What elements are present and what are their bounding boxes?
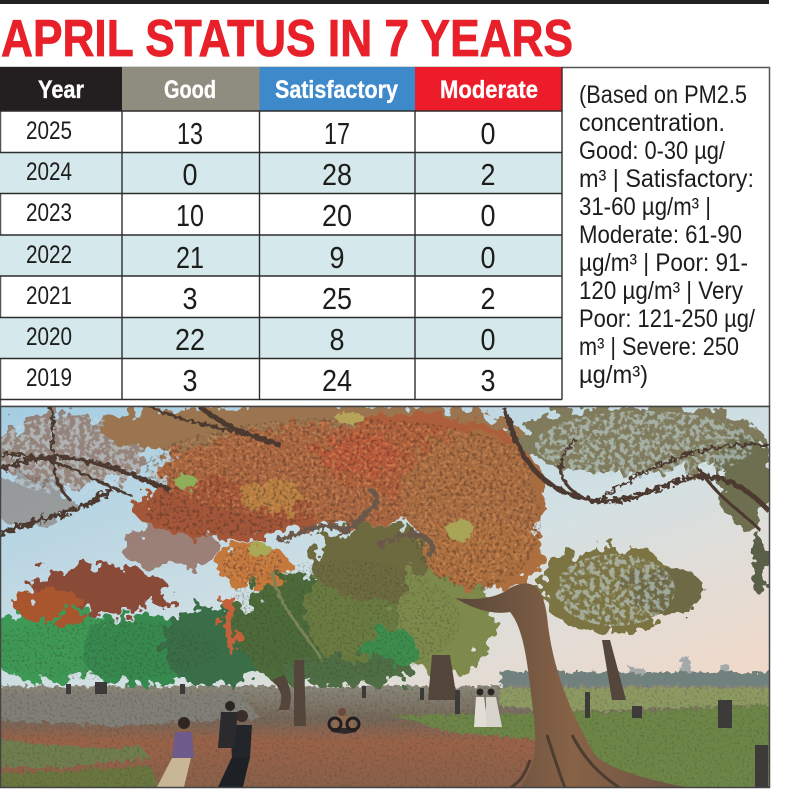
row 2019: 2019 xyxy=(26,364,72,392)
row 2020 xyxy=(26,322,496,357)
title: APRIL STATUS IN 7 YEARS xyxy=(1,10,573,68)
panel: frame xyxy=(0,68,770,406)
row 2024: 0 xyxy=(182,157,198,192)
table row fills xyxy=(0,152,562,358)
table header: Year xyxy=(38,76,84,104)
canopy light texture xyxy=(150,420,537,583)
table header xyxy=(0,67,562,111)
row 2019: 24 xyxy=(322,363,352,398)
left tree foliage xyxy=(0,414,220,621)
ground xyxy=(0,686,780,798)
row 2021 xyxy=(26,281,496,316)
row 2019: 3 xyxy=(182,363,198,398)
row 2023: 0 xyxy=(480,198,496,233)
ground texture xyxy=(0,686,770,788)
table header: Good xyxy=(164,76,216,104)
photo border xyxy=(0,406,770,788)
sky gaps in outer foliage xyxy=(0,411,755,626)
note: PM2.5 category ranges: m³ | Satisfactory: xyxy=(579,165,754,193)
people xyxy=(66,682,768,787)
row 2024: 2 xyxy=(480,157,496,192)
distant skyline xyxy=(498,656,769,689)
row 2020: 22 xyxy=(175,322,205,357)
table: April status by year xyxy=(0,67,562,400)
note: PM2.5 category ranges: 31-60 µg/m³ | xyxy=(579,193,711,221)
note: PM2.5 category ranges: 120 µg/m³ | Very xyxy=(579,277,743,305)
main trunk xyxy=(455,583,690,788)
row 2024: 28 xyxy=(322,157,352,192)
row 2022: 0 xyxy=(480,240,496,275)
row 2025 xyxy=(26,116,496,151)
row 2020: 8 xyxy=(330,322,344,357)
row 2022: 9 xyxy=(330,240,344,275)
note: PM2.5 category ranges xyxy=(579,81,755,389)
table header: Satisfactory xyxy=(275,76,398,104)
branches xyxy=(0,407,768,660)
row 2025: 2025 xyxy=(26,117,72,145)
row 2021: 3 xyxy=(182,281,198,316)
note: PM2.5 category ranges: Good: 0-30 µg/ xyxy=(579,137,725,165)
top right tree foliage xyxy=(515,406,770,634)
row 2024 xyxy=(26,157,496,192)
row 2023: 2023 xyxy=(26,199,72,227)
note: PM2.5 category ranges: Moderate: 61-90 xyxy=(579,221,742,249)
table grid xyxy=(0,67,562,400)
row 2019 xyxy=(26,363,496,398)
note: PM2.5 category ranges: (Based on PM2.5 xyxy=(579,81,747,109)
note: PM2.5 category ranges: Poor: 121-250 µg/ xyxy=(579,305,755,333)
note: PM2.5 category ranges: m³ | Severe: 250 xyxy=(579,333,739,361)
row 2023: 10 xyxy=(176,198,204,233)
row 2024: 2024 xyxy=(26,158,72,186)
main canopy xyxy=(100,400,547,655)
row 2019: 3 xyxy=(480,363,496,398)
row 2025: 13 xyxy=(177,116,203,151)
row 2021: 2021 xyxy=(26,282,72,310)
green tree texture xyxy=(0,560,460,680)
top rule xyxy=(0,0,769,4)
row 2025: 17 xyxy=(324,116,350,151)
row 2023: 20 xyxy=(322,198,352,233)
row 2021: 2 xyxy=(480,281,496,316)
group in white xyxy=(474,688,502,727)
mid tree trunks xyxy=(272,640,626,726)
row 2020: 0 xyxy=(480,322,496,357)
row 2025: 0 xyxy=(480,116,496,151)
row 2022: 21 xyxy=(176,240,204,275)
row 2023 xyxy=(26,198,496,233)
row 2022: 2022 xyxy=(26,241,72,269)
leaf highlights xyxy=(174,412,474,557)
green trees xyxy=(0,524,495,686)
sky xyxy=(0,407,770,692)
distant walkers xyxy=(66,682,768,787)
table header: Moderate xyxy=(440,76,538,104)
row 2022 xyxy=(26,240,496,275)
note: PM2.5 category ranges: concentration. xyxy=(579,109,725,137)
note: PM2.5 category ranges: µg/m³ | Poor: 91- xyxy=(579,249,748,277)
photo: flowering tree in park xyxy=(0,400,780,798)
note: PM2.5 category ranges: µg/m³) xyxy=(579,361,648,389)
motorbike xyxy=(329,708,359,734)
canopy dark texture xyxy=(145,418,541,590)
couple in foreground xyxy=(157,701,252,787)
row 2021: 25 xyxy=(322,281,352,316)
row 2020: 2020 xyxy=(26,323,72,351)
